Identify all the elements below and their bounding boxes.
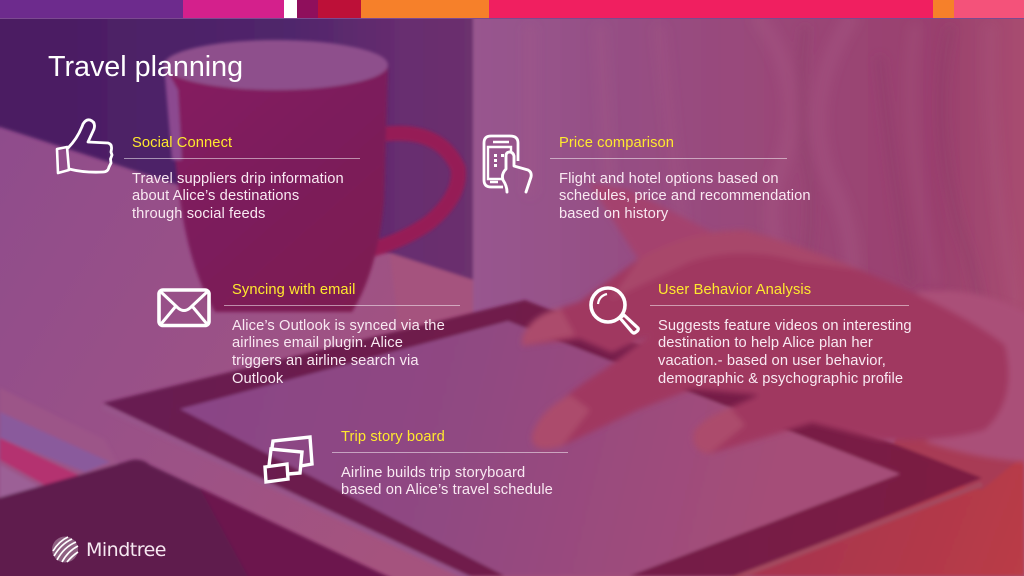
text block: based on history (559, 206, 668, 222)
rug stripes (0, 388, 118, 500)
text block (559, 170, 811, 222)
text block: Flight and hotel options based on (559, 170, 779, 186)
heading: Trip story board (341, 429, 445, 445)
panel: user behavior analysis (589, 282, 912, 387)
text block (232, 318, 445, 387)
text block: about Alice’s destinations (132, 188, 299, 204)
text block: triggers an airline search via (232, 353, 419, 369)
text block: based on Alice’s travel schedule (341, 482, 553, 498)
heading: Social Connect (132, 135, 232, 151)
text block: demographic & psychographic profile (658, 371, 903, 387)
text block: Travel suppliers drip information (132, 170, 344, 186)
text block: Airline builds trip storyboard (341, 464, 525, 480)
hand and fingers (522, 230, 1009, 454)
text block: airlines email plugin. Alice (232, 335, 403, 351)
sweater knit cables (530, 20, 1015, 310)
mug handle, body and rim (370, 133, 458, 250)
text block (341, 464, 553, 498)
icon: stacked photos (263, 435, 314, 484)
icon: thumbs up (56, 118, 114, 174)
text block: schedules, price and recommendation (559, 188, 811, 204)
text block: vacation.- based on user behavior, (658, 353, 886, 369)
panel: trip story board (263, 429, 568, 498)
text block: Outlook (232, 371, 283, 387)
heading: Price comparison (559, 135, 674, 151)
heading: User Behavior Analysis (658, 282, 811, 298)
raised index finger (589, 183, 712, 262)
tablet frame, bevel and screen (103, 300, 982, 576)
text block: through social feeds (132, 206, 265, 222)
text block: Alice’s Outlook is synced via the (232, 318, 445, 334)
red table lower right (739, 455, 1024, 576)
phone in the lower left (0, 460, 395, 576)
text block: Suggests feature videos on interesting (658, 318, 912, 334)
logo: Mindtree (52, 536, 166, 562)
panel: syncing with email (157, 282, 460, 387)
title: Travel planning (48, 51, 243, 83)
icon: envelope (157, 288, 211, 328)
icon: smartphone touch (482, 134, 533, 194)
sweater cuff (915, 291, 1024, 462)
icon: magnifying glass (589, 286, 640, 335)
text block: destination to help Alice plan her (658, 335, 873, 351)
heading: Syncing with email (232, 282, 355, 298)
text block (132, 170, 344, 222)
panel: social connect (56, 118, 360, 222)
panel: price comparison (482, 134, 811, 222)
icon: globe mark (52, 536, 78, 562)
text block (658, 318, 912, 387)
logo wordmark: Mindtree (86, 539, 166, 561)
top colour bar (0, 0, 1024, 19)
